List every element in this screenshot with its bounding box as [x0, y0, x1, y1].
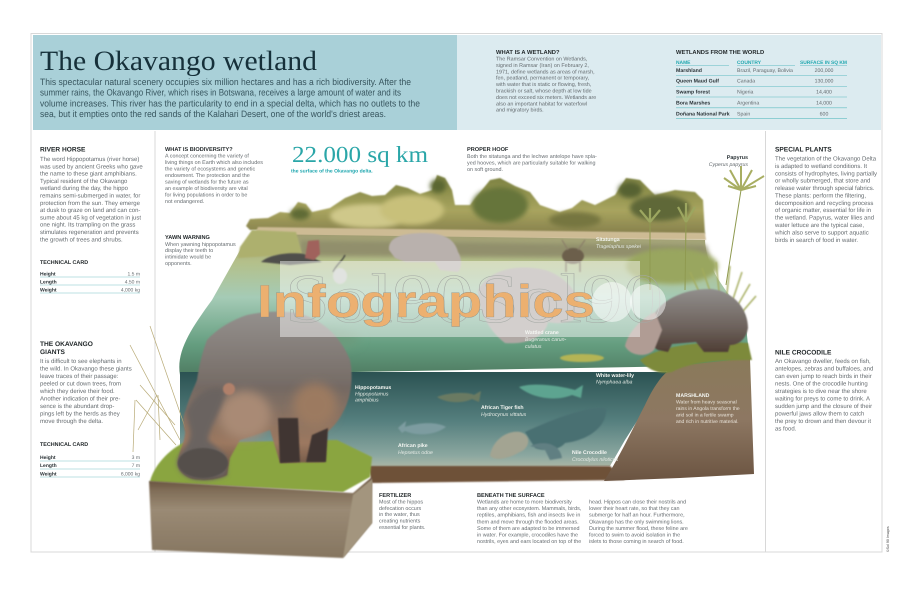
text: special plants: [774, 146, 877, 244]
text: special plants: decomposition and recycling process: [775, 200, 873, 207]
African pike: [398, 421, 446, 434]
table: wetlands from the world: Bora Marshes: [676, 101, 710, 107]
table: wetlands from the world: [676, 49, 847, 118]
text: beneath the surface: BENEATH THE SURFACE: [477, 493, 545, 499]
text: Nile crocodile: waiting for preys to come to drink. A: [774, 396, 870, 402]
text: what is biodiversity: not endangered.: [165, 199, 204, 205]
text: beneath the surface: lower their heart rate, so that they can: [589, 506, 680, 512]
text: special plants: or wholly submerged, that store and: [775, 178, 870, 185]
table: wetlands from the world: SURFACE IN SQ KM: [800, 60, 847, 66]
left text: the Okavango giants: move through the delta.: [40, 418, 103, 425]
text: special plants: SPECIAL PLANTS: [775, 146, 832, 154]
marsh grass: [640, 342, 752, 373]
left text: the Okavango giants: GIANTS: [40, 349, 66, 356]
what is a wetland text: [495, 49, 596, 114]
text: what is biodiversity: for living populations in order to be: [165, 192, 247, 198]
sitatunga antelope: [562, 240, 585, 272]
technical card: giants: Length: [40, 463, 57, 469]
Nile crocodile: [490, 408, 606, 460]
text: fertilizer: [379, 493, 425, 531]
introduction text: This spectacular natural scenery occupies six million hectares and has a rich biodiversity. After the: [40, 77, 411, 87]
label: white water-lily: Nymphaea alba: [596, 380, 632, 386]
table: wetlands from the world: Argentina: [737, 101, 759, 107]
text: yawn warning: display their teeth to: [165, 248, 213, 254]
text: yawn warning: When yawning hippopotamus: [165, 242, 236, 248]
front-left pale water reflection: [220, 328, 360, 352]
22,000 sq km headline figure: the surface of the Okavango delta.: [291, 168, 373, 174]
technical card: giants: 3 m: [132, 455, 140, 461]
header panel: title and introduction: [33, 35, 457, 130]
technical card: river horse: 1.5 m: [127, 272, 140, 278]
what is a wetland text: The Ramsar Convention on Wetlands,: [496, 56, 588, 62]
table: wetlands from the world: WETLANDS FROM THE WORLD: [676, 49, 764, 56]
hippopotamus legs: [278, 418, 328, 463]
left text: the Okavango giants: [39, 341, 132, 425]
header panel: wetland definition and table: [457, 35, 881, 130]
technical card: giants: Weight: [40, 472, 57, 478]
text: Nile crocodile: can even jump to reach birds in their: [775, 373, 872, 380]
hippopotamus muzzle: [178, 448, 228, 478]
22,000 sq km headline figure: 22.000 sq km: [292, 142, 428, 167]
text: special plants: release water through special fabrics.: [775, 185, 875, 192]
text: beneath the surface: than any other ecosystem. Mammals, birds,: [477, 506, 582, 512]
text: what is biodiversity: the variety of ecosystems and genetic: [165, 166, 255, 172]
credit: ©Sol 90 Images: [886, 526, 890, 552]
introduction text: summer rains, the Okavango River, which rises in Botswana, receives a large amount of water and its: [40, 88, 401, 98]
text: Nile crocodile: powerful jaws allow them to catch: [775, 410, 864, 418]
watermark overlay: Sol90Sol90: [285, 261, 663, 338]
label: African pike: African pike: [398, 443, 428, 449]
label: Nile crocodile: Crocodylus niloticus: [572, 457, 619, 463]
introduction text: volume increases. This river has the particularity to end in a special delta, which has no outlets to the: [40, 98, 420, 108]
soil block side: [343, 479, 372, 558]
marshland soil mound: [604, 358, 754, 481]
introduction text: sea, but it empties onto the red sands of the Kalahari Desert, one of the world's driest areas.: [40, 109, 386, 119]
reed bed left: [238, 230, 302, 258]
label: wattled crane: Bugeranus carun-: [525, 337, 567, 343]
text: Nile crocodile: [774, 350, 873, 432]
text: beneath the surface: islets to those coming in search of food.: [589, 539, 684, 545]
left text: the Okavango giants: leave traces of their passage:: [40, 373, 119, 380]
text: Nile crocodile: nests. One of the crocodile hunting: [775, 380, 868, 388]
small fish: [437, 391, 481, 402]
text: proper hoof: yed hooves, which are particularly suitable for walking: [467, 160, 596, 166]
reeds behind the hippopotamus: [130, 326, 186, 452]
text: beneath the surface: in water. For example, crocodiles have the: [477, 533, 578, 539]
left text: river horse: was used by ancient Greeks who gave: [39, 163, 143, 170]
middle hippopotamus drinking: [478, 267, 582, 343]
table: wetlands from the world: Swamp forest: [676, 90, 710, 96]
text: beneath the surface: submerge for half an hour. Furthermore,: [589, 513, 685, 519]
text: yawn warning: intimidate would be: [165, 254, 211, 260]
right hippopotamus: [625, 289, 748, 355]
left text: the Okavango giants: peeled or cut down trees, from: [40, 380, 121, 388]
text: what is biodiversity: [165, 147, 263, 205]
technical card: giants: 7 m: [132, 463, 140, 469]
text: fertilizer: essential for plants.: [379, 525, 425, 531]
technical card: giants: [40, 442, 140, 478]
table: wetlands from the world: Brazil, Paraguay, Bolivia: [737, 68, 793, 74]
hippopotamus head shading: [177, 388, 227, 480]
text: Nile crocodile: NILE CROCODILE: [775, 350, 832, 356]
what is a wetland text: does not exceed six meters. Wetlands are: [496, 95, 596, 101]
label: hippopotamus: amphibius: [355, 398, 379, 404]
table: wetlands from the world: Nigeria: [737, 90, 754, 96]
label: Nile crocodile: [572, 450, 619, 463]
left text: river horse: sume about 45 kg of vegetation in just: [40, 214, 141, 221]
text: yawn warning: YAWN WARNING: [165, 235, 210, 241]
left text: the Okavango giants: sence is the abundant drop-: [40, 403, 114, 410]
left text: river horse: [39, 146, 143, 243]
illustration: wetland cross-section: [130, 166, 764, 558]
text: proper hoof: [467, 147, 597, 173]
left text: river horse: at dusk to graze on land and can con-: [40, 207, 140, 214]
label: wattled crane: culatus: [525, 344, 542, 350]
label: hippopotamus: [355, 385, 391, 404]
text: Nile crocodile: the prey to drown and then devour it: [775, 418, 871, 425]
text: special plants: is adapted to wetland conditions. It: [775, 163, 867, 170]
text: fertilizer: Most of the hippos: [379, 500, 423, 506]
label: marshland: Water from heavy seasonal: [676, 400, 737, 406]
label: marshland: and rich in nutritive material.: [676, 419, 739, 425]
technical card: giants: 6,000 kg: [121, 472, 140, 478]
label: white water-lily: White water-lily: [596, 373, 634, 379]
soil block: [149, 477, 372, 558]
left text: the Okavango giants: the wild. In Okavango these giants: [40, 366, 132, 372]
left text: river horse: the growth of trees and shrubs.: [40, 236, 123, 243]
table: wetlands from the world: Marshland: [676, 68, 702, 74]
label: marshland: MARSHLAND: [676, 393, 710, 399]
text: special plants: which also serve to support aquatic: [774, 229, 869, 236]
left text: river horse: wetland during the day, the hippo: [39, 185, 129, 192]
technical card: river horse: [40, 260, 140, 294]
text: what is biodiversity: WHAT IS BIODIVERSITY?: [165, 147, 233, 153]
technical card: river horse: Height: [40, 272, 56, 278]
label: Nile crocodile: Nile Crocodile: [572, 450, 607, 456]
left text: the Okavango giants: pings left by the herds as they: [40, 410, 120, 418]
papyrus head: [724, 166, 764, 190]
what is a wetland text: also an important habitat for waterfowl: [496, 101, 587, 107]
table: wetlands from the world: COUNTRY: [737, 60, 762, 66]
table: wetlands from the world: 200,000: [815, 68, 833, 74]
left text: river horse: protection from the sun. They emerge: [40, 200, 141, 207]
text: Nile crocodile: sudden jump and the closure of their: [775, 403, 872, 410]
left text: river horse: The word Hippopotamus (river horse): [40, 156, 139, 163]
table: wetlands from the world: 14,000: [816, 101, 832, 107]
label: white water-lily: [596, 373, 634, 386]
title: The Okavango wetland: [40, 46, 317, 77]
left text: river horse: Typical resident of the Okavango: [40, 178, 128, 185]
text: what is biodiversity: endowment. The protection and the: [165, 173, 250, 179]
far tree line: [246, 175, 705, 234]
crane: [333, 255, 347, 284]
introduction text: [40, 77, 420, 119]
text: beneath the surface: Some of them are adapted to be immersed: [477, 526, 579, 532]
text: fertilizer: in the water, thus: [379, 512, 420, 518]
text: beneath the surface: Okavango has the only swimming lions.: [589, 519, 684, 525]
text: Nile crocodile: as food.: [775, 426, 797, 432]
technical card: river horse: Weight: [40, 288, 57, 294]
technical card: river horse: Length: [40, 280, 57, 286]
text: yawn warning: opponents.: [165, 261, 192, 267]
watermark overlay: Infographics: [257, 275, 595, 327]
text: special plants: water lettuce are the typical case,: [774, 222, 864, 229]
label: wattled crane: [525, 330, 567, 350]
technical card: river horse: 4,000 kg: [121, 288, 140, 294]
table: wetlands from the world: Canada: [737, 79, 755, 85]
text: beneath the surface: head. Hippos can close their nostrils and: [589, 500, 686, 506]
label: African pike: Hepsetus odoe: [398, 450, 433, 456]
grass top: [150, 440, 372, 492]
yawning hippopotamus: [261, 240, 322, 265]
reeds fan at the right edge: [690, 262, 756, 326]
left text: river horse: RIVER HORSE: [40, 146, 86, 154]
label: African tiger fish: African Tiger fish: [481, 405, 524, 411]
text: Nile crocodile: antelopes, zebras and buffaloes, and: [775, 366, 873, 372]
text: proper hoof: on soft ground.: [467, 167, 503, 173]
label: African tiger fish: Hydrocynus vittatus: [481, 412, 527, 418]
text: what is biodiversity: an example of biodiversity are vital: [165, 186, 248, 192]
label: marshland: rains in Angola transform the: [676, 406, 740, 412]
label: marshland: arid soil in a fertile swamp: [676, 412, 734, 418]
text: fertilizer: FERTILIZER: [379, 493, 411, 499]
text: beneath the surface: nostrils, eyes and ears located on top of the: [477, 539, 581, 545]
text: beneath the surface: During the summer flood, these feline are: [589, 526, 688, 532]
text: Nile crocodile: An Okavango dweller, feeds on fish,: [775, 358, 871, 365]
22,000 sq km headline figure: [291, 142, 428, 174]
label: papyrus: Papyrus: [727, 155, 748, 161]
what is a wetland text: WHAT IS A WETLAND?: [496, 49, 560, 56]
text: what is biodiversity: saving of wetlands for the future as: [165, 180, 249, 186]
underwater section: [180, 372, 680, 470]
table: wetlands from the world: 600: [820, 111, 828, 117]
label: papyrus: Cyperus papyrus: [709, 162, 748, 168]
water surface: [179, 234, 750, 375]
text: special plants: The vegetation of the Okavango Delta: [775, 156, 877, 162]
text: beneath the surface: [477, 493, 688, 545]
what is a wetland text: with water that is static or flowing, fresh,: [495, 82, 592, 88]
label: hippopotamus: Hippopotamus: [355, 392, 389, 398]
what is a wetland text: and migratory birds.: [496, 108, 544, 114]
label: African tiger fish: [481, 405, 527, 418]
text: beneath the surface: them and move through the flooded areas.: [477, 519, 579, 525]
tuft of papyrus and reeds: [640, 166, 764, 290]
what is a wetland text: 1971, define wetlands as areas of marsh,: [496, 69, 595, 75]
water-lily pads: [560, 354, 604, 362]
table: wetlands from the world: Queen Maud Gulf: [676, 79, 719, 85]
label: sitatunga: Tragelaphus spekei: [596, 244, 642, 250]
left text: the Okavango giants: It is difficult to see elephants in: [40, 358, 122, 365]
table: wetlands from the world: Spain: [737, 111, 750, 117]
label: marshland: [676, 393, 740, 425]
label: sitatunga: Sitatunga: [596, 237, 620, 243]
bottom sediment: [368, 466, 625, 483]
what is a wetland text: brackish or salt, whose depth at low tide: [496, 88, 592, 94]
text: yawn warning: [165, 235, 236, 267]
text: special plants: birds in search of food in water.: [775, 237, 858, 244]
left text: river horse: the name to these giant amphibians.: [40, 171, 137, 178]
sandy river bank: [254, 227, 706, 240]
hippopotamus flank highlight: [293, 383, 337, 427]
what is a wetland text: fen, peatland, permanent or temporary,: [496, 76, 590, 82]
text: what is biodiversity: A concept concerning the variety of: [165, 154, 249, 160]
hippopotamus neck skin: [219, 391, 271, 439]
table: wetlands from the world: NAME: [676, 60, 691, 66]
hippopotamus body: [178, 312, 352, 480]
left text: the Okavango giants: THE OKAVANGO: [40, 341, 93, 348]
text: special plants: These plants: perform the filtering,: [775, 192, 866, 199]
text: special plants: of organic matter, essential for life in: [775, 207, 871, 214]
label: African pike: [398, 443, 433, 456]
what is a wetland text: signed in Ramsar (Iran) on February 2,: [496, 63, 589, 69]
text: proper hoof: Both the sitatunga and the lechwe antelope have spla-: [467, 154, 597, 160]
technical card: giants: TECHNICAL CARD: [40, 442, 88, 448]
left text: river horse: one night. Its trampling on the grass: [40, 222, 135, 229]
label: papyrus: [709, 155, 748, 168]
large hippopotamus with grass block: [130, 312, 372, 558]
labels on the illustration: [355, 237, 740, 463]
table: wetlands from the world: 14,400: [816, 90, 832, 96]
text: special plants: the wetland. Papyrus, water lilies and: [775, 215, 874, 222]
text: beneath the surface: forced to swim to avoid isolation in the: [589, 533, 680, 539]
left text: river horse: stimulates regeneration and prevents: [40, 229, 139, 236]
text: what is biodiversity: living things on Earth which also includes: [165, 160, 263, 166]
technical card: river horse: TECHNICAL CARD: [40, 260, 88, 266]
far hippopotamus: [389, 233, 461, 272]
left text: the Okavango giants: which they derive their food.: [39, 388, 115, 395]
label: wattled crane: Wattled crane: [525, 330, 559, 336]
text: proper hoof: PROPER HOOF: [467, 147, 509, 153]
technical card: river horse: 4.50 m: [125, 280, 140, 286]
label: hippopotamus: Hippopotamus: [355, 385, 391, 391]
text: special plants: consists of hydrophytes, living partially: [775, 170, 877, 177]
tiger fish: [519, 385, 583, 398]
reed bed right: [626, 248, 718, 284]
label: sitatunga: [596, 237, 642, 250]
distant water reflections: [300, 240, 710, 258]
table: wetlands from the world: 130,000: [815, 79, 833, 85]
technical card: giants: Height: [40, 455, 56, 461]
table: wetlands from the world: Doñana National Park: [676, 111, 730, 117]
hippopotamus ear: [223, 383, 235, 395]
text: fertilizer: creating nutrients: [379, 518, 421, 524]
text: beneath the surface: reptiles, amphibians, fish and insects live in: [477, 513, 580, 519]
text: fertilizer: defecation occurs: [379, 506, 422, 512]
text: beneath the surface: Wetlands are home to more biodiversity: [477, 500, 572, 506]
text: Nile crocodile: strategies is to dive near the shore: [775, 388, 867, 395]
left text: the Okavango giants: Another indication of their pre-: [40, 396, 120, 402]
left text: river horse: remains semi-submerged in water, for: [40, 192, 140, 200]
